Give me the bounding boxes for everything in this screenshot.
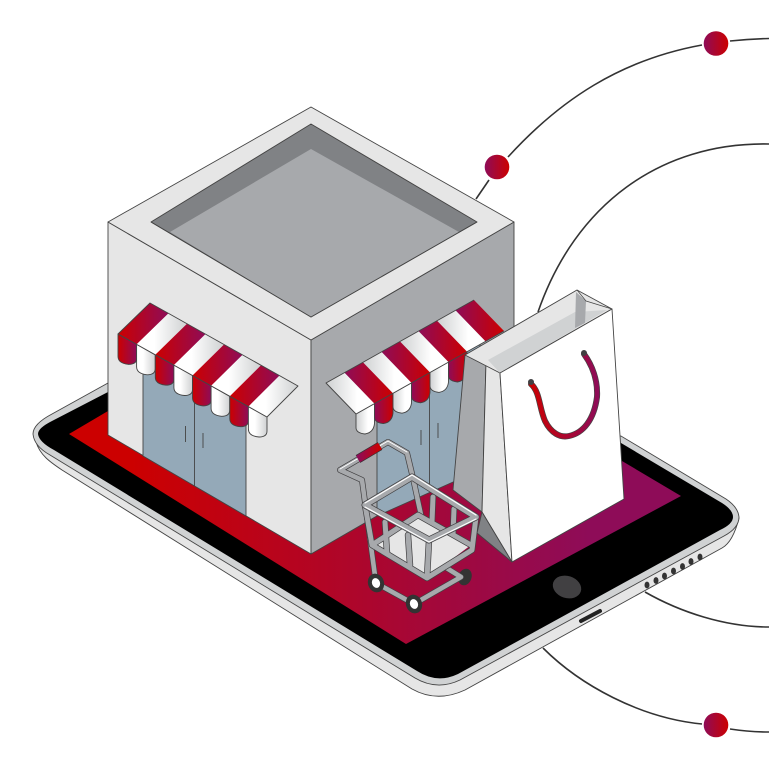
cart handle and base frame [340, 441, 461, 604]
cart back wheel [456, 567, 474, 587]
cart basket floor [372, 515, 471, 578]
tablet screen black [38, 392, 733, 678]
cart rim [365, 475, 476, 542]
bag front [500, 309, 624, 562]
shopping bag [453, 290, 624, 562]
charging port [581, 611, 600, 621]
right wall [311, 222, 514, 554]
tablet screen display [69, 411, 681, 644]
cart front wheels [365, 571, 425, 616]
home button [550, 572, 584, 602]
store building [108, 107, 514, 554]
shopping cart [340, 441, 476, 616]
cart grip [358, 446, 380, 459]
roof floor [170, 149, 459, 317]
bag side gusset [453, 355, 486, 512]
bag handle [528, 350, 597, 436]
roof [108, 107, 514, 340]
cart basket bars [365, 497, 476, 578]
node dots [485, 31, 728, 737]
connector lines [476, 38, 769, 732]
tablet side edge [36, 420, 739, 696]
left wall [108, 222, 311, 554]
left awning [118, 303, 298, 437]
right awning [326, 300, 504, 434]
bag opening [465, 290, 612, 373]
tablet [33, 383, 739, 696]
right door [377, 340, 480, 516]
tablet bezel [33, 383, 739, 685]
left door [143, 350, 246, 516]
roof opening [151, 124, 477, 317]
speaker holes [644, 554, 702, 588]
